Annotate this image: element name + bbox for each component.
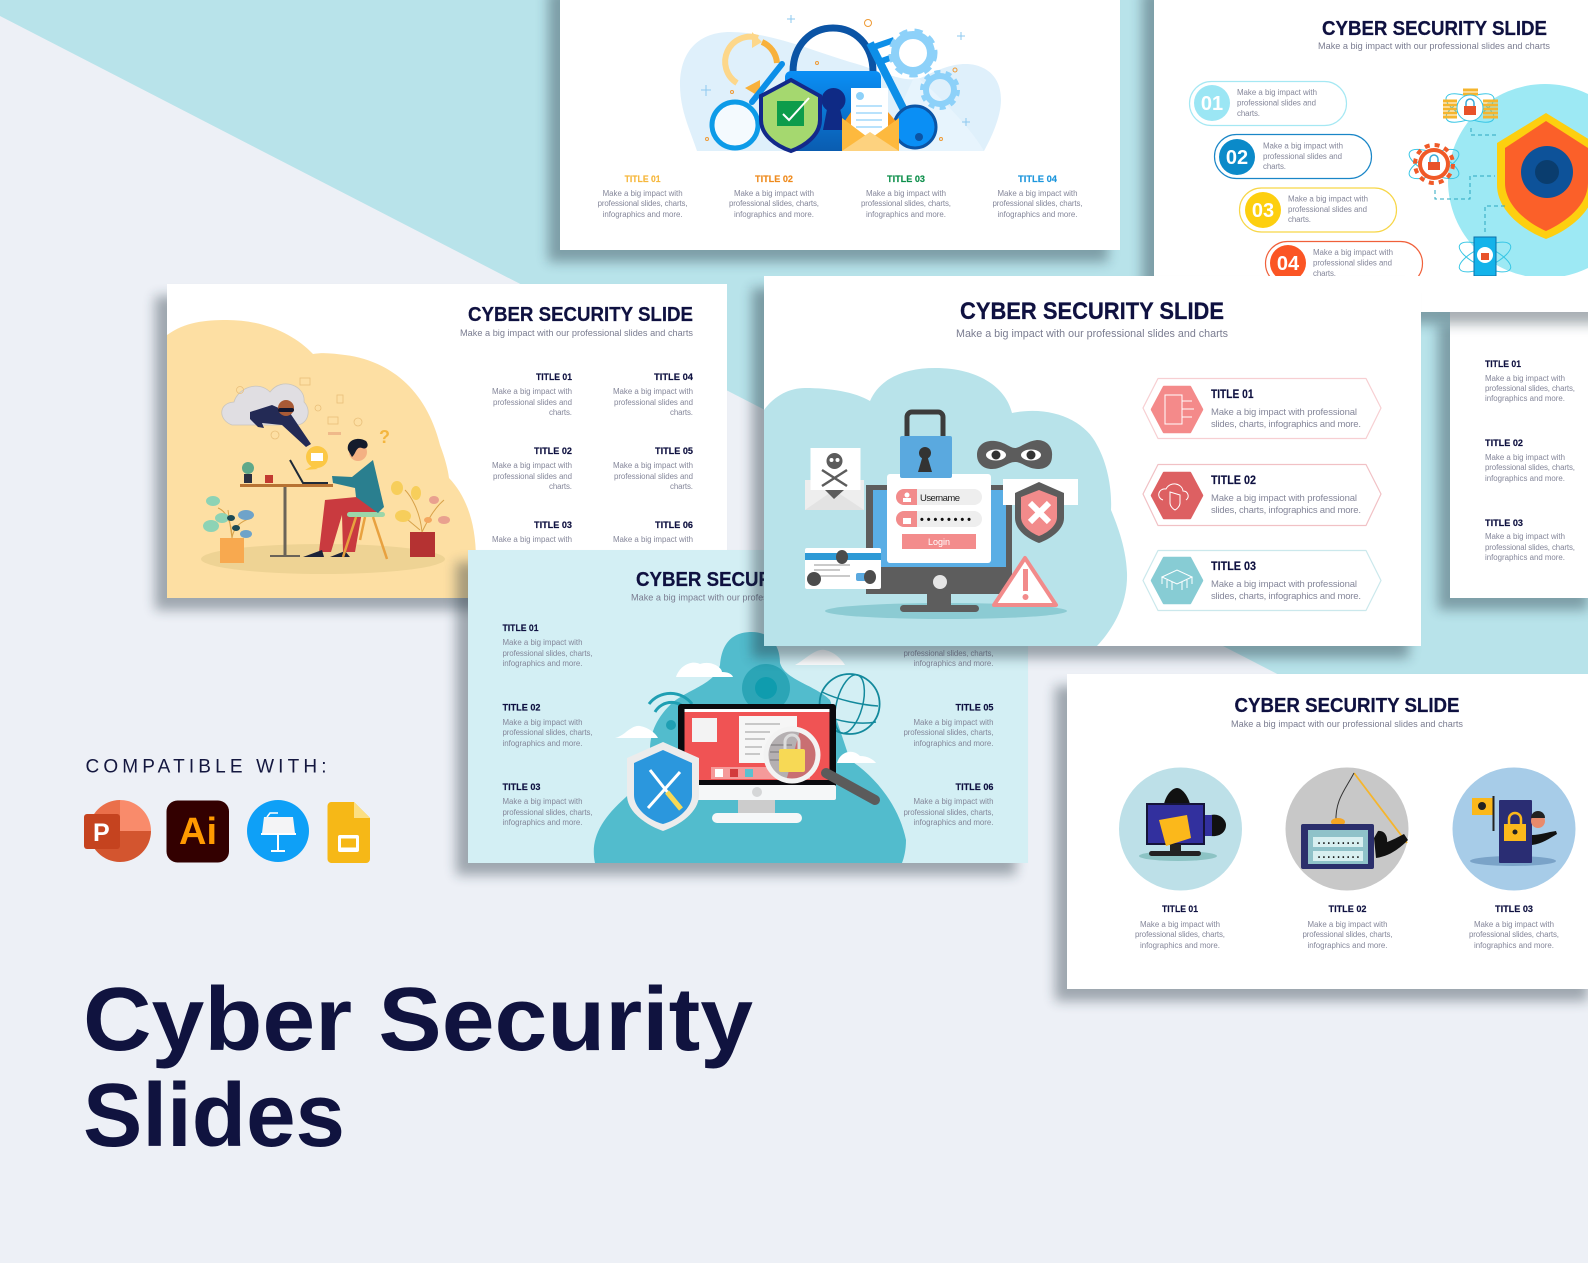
text block: left title 02: Make a big impact with xyxy=(492,461,572,470)
illustration: padlock with key and shield xyxy=(680,15,1001,151)
text block: title 02: Make a big impact with xyxy=(1485,453,1565,462)
text block: left title 04: professional slides and xyxy=(614,398,693,407)
text block: left title 04: TITLE 04 xyxy=(654,372,694,383)
pill 04: Make a big impact with xyxy=(1313,248,1393,257)
text block: title 03: professional slides, charts, xyxy=(1485,543,1575,552)
title: Cyber Security xyxy=(83,970,753,1070)
text block: teal title 06: Make a big impact with xyxy=(914,797,994,806)
text block: bottom title 02: TITLE 02 xyxy=(1328,904,1366,915)
pill 02: Make a big impact with xyxy=(1263,142,1343,150)
text block: left title 03: TITLE 03 xyxy=(534,520,572,531)
text block: teal title 01: TITLE 01 xyxy=(502,623,539,634)
pill 01: charts. xyxy=(1237,109,1260,118)
pill 01: Make a big impact with xyxy=(1237,88,1317,97)
text block: teal title 02: infographics and more. xyxy=(502,739,582,748)
feature: title 01 xyxy=(1143,378,1381,438)
text block: bottom title 03: professional slides, charts, xyxy=(1469,930,1559,939)
text block: bottom title 01: Make a big impact with xyxy=(1140,920,1220,929)
text block: teal title 06: TITLE 06 xyxy=(956,782,994,793)
text block: title 02: professional slides, charts, xyxy=(1485,463,1575,472)
pill 02: 02 xyxy=(1226,147,1248,169)
text block: bottom title 01: TITLE 01 xyxy=(1162,904,1199,915)
feature: title 02 xyxy=(1143,464,1381,526)
text block: bottom title 02 xyxy=(1302,904,1392,950)
icon circle: phishing login laptop xyxy=(1286,768,1408,890)
text block: title 03: infographics and more. xyxy=(1485,553,1565,562)
text block: teal title 03: Make a big impact with xyxy=(502,797,582,806)
text block: top title 03: professional slides, charts, xyxy=(861,199,951,208)
text block: bottom title 02: professional slides, charts, xyxy=(1302,930,1392,939)
feature: title 01: slides, charts, infographics and more. xyxy=(1211,419,1361,430)
illustration: login monitor in cloud: •••••••• xyxy=(920,514,971,526)
icon: PowerPoint: P xyxy=(93,819,110,847)
text block: teal title 05 xyxy=(904,702,994,748)
text block: title 03: Make a big impact with xyxy=(1485,532,1565,541)
text block: title 01 xyxy=(1485,359,1575,403)
text block: teal title 01: infographics and more. xyxy=(502,659,582,668)
text block: title 01: Make a big impact with xyxy=(1485,374,1565,383)
pill 02: charts. xyxy=(1263,162,1286,171)
pill 02: professional slides and xyxy=(1263,152,1342,161)
feature: title 03: Make a big impact with professional xyxy=(1211,579,1357,590)
text block: left title 05: charts. xyxy=(670,482,693,491)
icon: database lock xyxy=(1443,88,1498,123)
text block: left title 02: charts. xyxy=(549,482,572,491)
feature: title 03: TITLE 03 xyxy=(1211,559,1256,573)
text block: bottom title 02: Make a big impact with xyxy=(1308,920,1388,929)
text block: teal title 02: Make a big impact with xyxy=(502,718,582,727)
title: Slides xyxy=(83,1066,345,1166)
illustration: login monitor in cloud: Login xyxy=(928,537,950,547)
heading: CYBER SECURITY SLIDE xyxy=(1322,17,1547,40)
text block: left title 04: Make a big impact with xyxy=(613,387,693,396)
icon circle: phone with padlock and flag xyxy=(1452,768,1576,890)
text block: left title 04 xyxy=(613,372,694,417)
pill 01 xyxy=(1190,82,1346,126)
text block: bottom title 01: professional slides, charts, xyxy=(1135,930,1225,939)
text block: top title 01: Make a big impact with xyxy=(603,189,683,198)
text block: teal title 03: professional slides, charts, xyxy=(502,808,592,817)
pill 04 xyxy=(1264,240,1424,276)
text block: top title 02: Make a big impact with xyxy=(734,189,814,198)
panel: teal slide xyxy=(456,550,1028,875)
text block: left title 01 xyxy=(492,372,573,417)
title xyxy=(83,970,753,1166)
feature: title 02: TITLE 02 xyxy=(1211,473,1256,487)
text block: teal title 03 xyxy=(502,782,592,827)
icon: gear lock xyxy=(1405,144,1463,184)
text block: teal title 02: TITLE 02 xyxy=(502,702,540,714)
text block: top title 04: infographics and more. xyxy=(998,210,1078,219)
text block: bottom title 03: Make a big impact with xyxy=(1474,920,1554,929)
text block: left title 05 xyxy=(613,446,694,491)
text block: top title 04: professional slides, charts, xyxy=(992,199,1082,208)
text block: top title 03 xyxy=(861,174,951,219)
pill 04: charts. xyxy=(1313,269,1336,278)
icon: Adobe Illustrator xyxy=(166,800,229,862)
illustration: login monitor in cloud xyxy=(764,368,1127,646)
text block: top title 03: Make a big impact with xyxy=(866,189,946,198)
panel: top slide xyxy=(548,0,1120,262)
text block: top title 03: TITLE 03 xyxy=(887,174,925,185)
numbered list and shield diagram xyxy=(1190,82,1588,286)
subheading (partly hidden): Make a big impact with our professional slides and charts xyxy=(631,592,863,604)
illustration: login monitor in cloud: Username xyxy=(920,493,960,504)
text block: teal title 05: professional slides, charts, xyxy=(904,728,994,737)
text block: left title 03: Make a big impact with xyxy=(492,535,572,544)
feature: title 03 xyxy=(1143,550,1381,610)
text block: teal title 01: Make a big impact with xyxy=(502,638,582,647)
heading: CYBER SECURITY SLIDE xyxy=(468,303,693,326)
text block: teal title 01 xyxy=(502,623,592,668)
pill 03 xyxy=(1240,188,1396,232)
icon: Adobe Illustrator: Ai xyxy=(179,811,217,853)
illustration: hacker and office worker xyxy=(167,320,476,598)
text block: left title 06 xyxy=(613,520,693,544)
text block: teal title 06: professional slides, charts, xyxy=(904,808,994,817)
subheading: Make a big impact with our professional slides and charts xyxy=(1318,41,1550,52)
text block: title 01: professional slides, charts, xyxy=(1485,384,1575,393)
panel: center slide xyxy=(752,276,1421,658)
icon circle: phishing login laptop: ••••••••• xyxy=(1318,855,1359,861)
text block: title 02: TITLE 02 xyxy=(1485,438,1523,449)
text block: title 01: TITLE 01 xyxy=(1485,359,1522,370)
text block: teal title 05: TITLE 05 xyxy=(956,702,994,714)
text block: title 03: TITLE 03 xyxy=(1485,518,1523,529)
subheading: Make a big impact with our professional slides and charts xyxy=(460,328,693,339)
feature: title 01: TITLE 01 xyxy=(1211,387,1254,401)
text block: teal title 06: infographics and more. xyxy=(914,818,994,827)
text block: teal title 01: professional slides, charts, xyxy=(502,649,592,658)
text block: teal title 06 xyxy=(904,782,994,827)
text block: bottom title 03: infographics and more. xyxy=(1474,941,1554,950)
pill 02 xyxy=(1214,134,1372,178)
text block: top title 04: Make a big impact with xyxy=(998,189,1078,198)
feature: title 02: slides, charts, infographics and more. xyxy=(1211,505,1361,516)
feature: title 02: Make a big impact with professional xyxy=(1211,493,1357,504)
text block: teal title 03: infographics and more. xyxy=(502,818,582,827)
text block: top title 04 xyxy=(992,174,1082,219)
text block: teal title 04 partially hidden xyxy=(904,649,994,668)
text block: top title 01: TITLE 01 xyxy=(625,174,661,185)
panel: left slide (yellow illustration) xyxy=(155,284,727,610)
text block: left title 03 xyxy=(492,520,572,544)
text block: top title 03: infographics and more. xyxy=(866,210,946,219)
text block: title 01: infographics and more. xyxy=(1485,394,1565,403)
text block: teal title 05: infographics and more. xyxy=(914,739,994,748)
text block: title 03 xyxy=(1485,518,1575,562)
text block: left title 05: professional slides and xyxy=(614,472,693,481)
illustration: shield on teal circle xyxy=(1435,84,1588,278)
pill 04: professional slides and xyxy=(1313,258,1392,268)
pill 03: Make a big impact with xyxy=(1288,194,1368,204)
panel: right cropped slide xyxy=(1438,312,1588,610)
text block: left title 06: TITLE 06 xyxy=(655,520,693,531)
text block: left title 01: professional slides and xyxy=(493,398,572,407)
icon circle: phishing login laptop: ••••••••• xyxy=(1318,841,1359,847)
text block: top title 01: professional slides, charts, xyxy=(598,199,688,208)
feature: title 01: Make a big impact with professional xyxy=(1211,407,1357,418)
text block: bottom title 01 xyxy=(1135,904,1225,950)
text block: top title 01: infographics and more. xyxy=(603,210,683,219)
teal diagonal background shape xyxy=(0,0,1588,834)
panel: top-right slide xyxy=(1142,0,1588,324)
text block: left title 01: charts. xyxy=(549,408,572,417)
icon: Google Slides xyxy=(327,802,370,863)
text block: teal title 04 partially hidden: professional slides, charts, xyxy=(904,649,994,658)
text block: left title 05: TITLE 05 xyxy=(655,446,694,457)
text block: teal title 03: TITLE 03 xyxy=(502,782,540,793)
illustration: hacker and office worker: ? xyxy=(379,427,390,447)
text block: top title 02: TITLE 02 xyxy=(755,174,793,185)
text block: top title 02: professional slides, charts, xyxy=(729,199,819,208)
icon circle: hacker and monitor xyxy=(1119,768,1242,890)
compatible with label: COMPATIBLE WITH: xyxy=(86,756,326,778)
heading: CYBER SECURITY SLIDE xyxy=(960,298,1224,325)
text block: top title 02 xyxy=(729,174,819,219)
text block: left title 04: charts. xyxy=(670,408,693,417)
text block: top title 02: infographics and more. xyxy=(734,210,814,219)
text block: left title 05: Make a big impact with xyxy=(613,461,693,470)
pill 03: 03 xyxy=(1252,200,1274,222)
text block: left title 02: TITLE 02 xyxy=(534,446,572,457)
text block: bottom title 01: infographics and more. xyxy=(1140,941,1220,950)
text block: left title 06: Make a big impact with xyxy=(613,535,693,544)
text block: teal title 02: professional slides, charts, xyxy=(502,728,592,737)
icon: Keynote xyxy=(247,800,309,862)
feature: title 03: slides, charts, infographics and more. xyxy=(1211,591,1361,602)
text block: bottom title 02: infographics and more. xyxy=(1308,941,1388,950)
pill 03: charts. xyxy=(1288,215,1311,224)
pill 03: professional slides and xyxy=(1288,205,1367,214)
text block: teal title 04 partially hidden: infographics and more. xyxy=(914,659,994,668)
text block: teal title 05: Make a big impact with xyxy=(914,718,994,727)
heading (partly hidden): CYBER SECURITY SLIDE xyxy=(636,568,861,591)
illustration: monitor, shield and magnifier xyxy=(594,632,906,863)
panel: bottom-right slide xyxy=(1055,674,1588,1001)
pill 01: 01 xyxy=(1201,93,1223,115)
pill 01: professional slides and xyxy=(1237,98,1316,108)
text block: title 02 xyxy=(1485,438,1575,483)
heading: CYBER SECURITY SLIDE xyxy=(1234,694,1460,717)
text block: bottom title 03 xyxy=(1469,904,1559,950)
text block: title 02: infographics and more. xyxy=(1485,474,1565,483)
text block: left title 01: TITLE 01 xyxy=(536,372,573,383)
subheading: Make a big impact with our professional slides and charts xyxy=(1231,719,1463,730)
text block: bottom title 03: TITLE 03 xyxy=(1495,904,1533,915)
text block: teal title 02 xyxy=(502,702,592,748)
text block: left title 02: professional slides and xyxy=(493,472,572,481)
icon: PowerPoint xyxy=(84,800,151,862)
pill 04: 04 xyxy=(1277,253,1300,275)
icon: phone lock xyxy=(1458,236,1512,276)
text block: top title 04: TITLE 04 xyxy=(1018,174,1058,185)
text block: left title 02 xyxy=(492,446,572,491)
subheading: Make a big impact with our professional slides and charts xyxy=(956,328,1228,340)
text block: left title 01: Make a big impact with xyxy=(492,387,572,396)
text block: top title 01 xyxy=(598,174,688,219)
